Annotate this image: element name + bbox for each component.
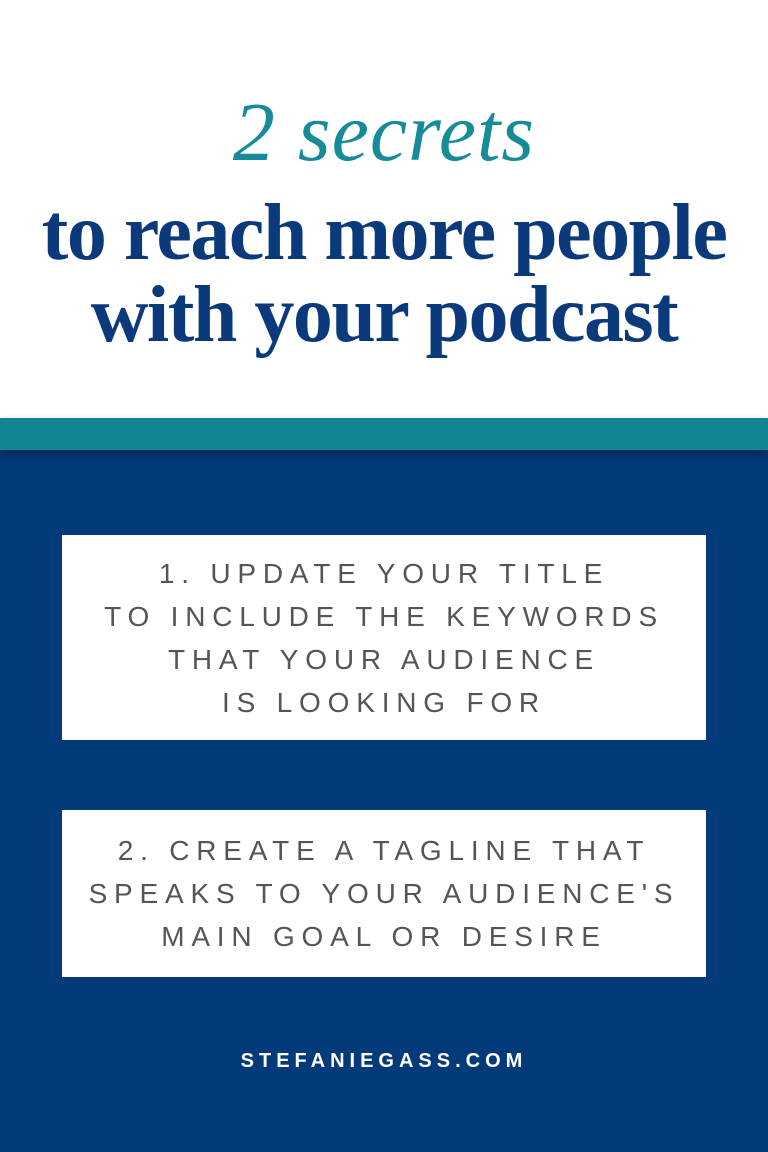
box 1: TO INCLUDE THE KEYWORDS xyxy=(104,600,664,632)
footer url: STEFANIEGASS.COM xyxy=(241,1050,527,1072)
box 1: THAT YOUR AUDIENCE xyxy=(168,644,600,674)
box 2: MAIN GOAL OR DESIRE xyxy=(161,921,607,952)
script heading: 2 secrets xyxy=(233,86,535,179)
title xyxy=(42,189,726,359)
box 1: 1. UPDATE YOUR TITLE xyxy=(159,558,609,588)
box 2: SPEAKS TO YOUR AUDIENCE'S xyxy=(89,878,679,909)
box 2: 2. CREATE A TAGLINE THAT xyxy=(118,835,650,866)
title: to reach more people xyxy=(42,189,726,277)
box 2 xyxy=(62,810,706,977)
navy panel xyxy=(0,450,768,1152)
box 1: IS LOOKING FOR xyxy=(222,686,546,718)
box 1 xyxy=(62,535,706,740)
title: with your podcast xyxy=(91,271,677,359)
teal band xyxy=(0,418,768,450)
